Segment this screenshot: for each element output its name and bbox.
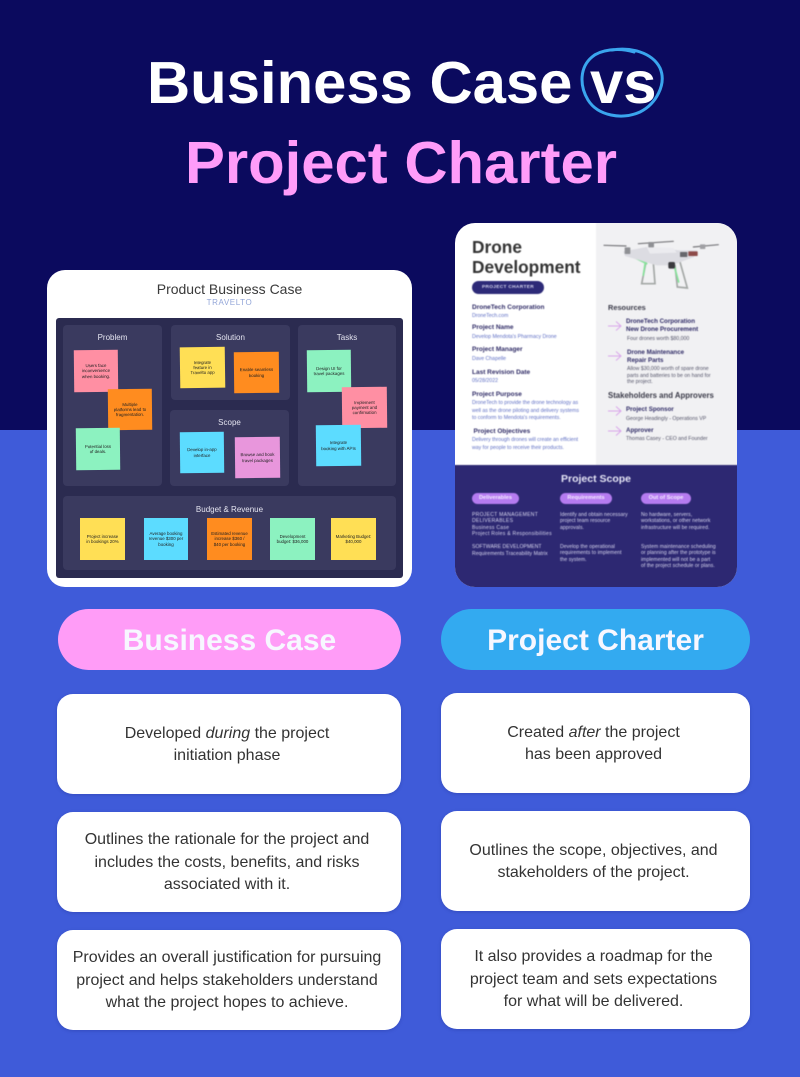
scope column: out of scope: infrastructure will be required. [641, 525, 709, 531]
charter tag: PROJECT CHARTER [482, 285, 534, 290]
scope column: deliverables: Project Roles & Responsibilities [472, 531, 552, 537]
field value: DroneTech to provide the drone technology as [472, 400, 578, 406]
sticky note: travel packages [314, 371, 344, 376]
heading pill: project charter: Project Charter [487, 624, 704, 657]
card: business case justification [57, 930, 401, 1030]
field value: way for people to receive their products. [472, 445, 564, 451]
panel: scope: Scope [218, 418, 241, 427]
title word: vs: vs [590, 49, 657, 116]
tag: requirements [560, 493, 612, 504]
sticky note: booking [249, 372, 264, 378]
panel: tasks [298, 325, 396, 486]
scope column: requirements: project team resource [560, 518, 610, 524]
sticky note [108, 389, 152, 430]
sticky note [342, 387, 387, 428]
tag: requirements: Requirements [567, 495, 605, 501]
sticky note: feature in [193, 365, 212, 370]
sticky note [76, 428, 120, 470]
tag: deliverables [472, 493, 519, 504]
sticky note: Browse and book [240, 452, 274, 457]
scope column: out of scope second block: System maintenance scheduling [641, 544, 716, 550]
approver title: Project Sponsor [626, 406, 674, 413]
scope column: requirements second block: Develop the operational [560, 544, 615, 550]
sticky note: Development [280, 534, 305, 539]
card: project charter roadmap: for what will be delivered. [504, 993, 683, 1010]
sticky note [234, 352, 279, 393]
resource title: Repair Parts [627, 357, 663, 364]
panel: problem: Problem [98, 333, 127, 342]
scope column: out of scope second block: or planning after the prototype is [641, 550, 716, 556]
charter resources [608, 303, 714, 442]
resource text: Allow $30,000 worth of spare drone [627, 366, 709, 372]
charter heading: Development [472, 257, 581, 277]
charter scope background [445, 465, 745, 595]
scope column: out of scope second block: of the project schedule or plans. [641, 563, 715, 569]
field: DroneTech Corporation [472, 304, 544, 311]
icon: arrow [608, 426, 622, 436]
scope column: deliverables: Business Case [472, 525, 509, 531]
charter heading [472, 237, 582, 278]
scope column: deliverables second block [472, 543, 548, 557]
panel: tasks: Tasks [337, 333, 357, 342]
sticky note [180, 432, 224, 473]
sticky note: of deals. [90, 449, 106, 454]
card: business case justification: Provides an overall justification for pursuing [73, 949, 381, 966]
field value [472, 436, 578, 451]
panel: solution [171, 325, 290, 400]
sticky note: fragmentation. [116, 412, 144, 417]
sticky note: Marketing Budget: [336, 534, 371, 539]
scope column: requirements: Identify and obtain necessary [560, 512, 628, 518]
scope heading: Project Scope [561, 473, 631, 485]
template subheading: TRAVELTO [207, 298, 252, 307]
sticky note: travel packages [242, 457, 273, 463]
card: project charter roadmap: It also provides a roadmap for the [474, 948, 713, 965]
resource title: DroneTech Corporation [626, 318, 695, 325]
sticky note: Integrate [330, 440, 347, 445]
resource title [626, 318, 699, 333]
card: business case rationale: includes the costs, benefits, and risks [94, 854, 360, 871]
scope column: out of scope: No hardware, servers, [641, 512, 692, 518]
card: project charter timing: has been approved [525, 746, 662, 763]
card: project charter scope [441, 811, 750, 911]
field: Project Manager [472, 346, 523, 353]
board background [56, 318, 403, 578]
panel: solution: Solution [216, 333, 245, 342]
sticky note: Average booking [150, 531, 182, 536]
section heading: Stakeholders and Approvers [608, 391, 714, 400]
approver text: George Headingly - Operations VP [626, 416, 706, 422]
approver text: Thomas Casey - CEO and Founder [626, 436, 708, 442]
sticky note: in bookings 20% [86, 539, 119, 544]
sticky note: Integrate [194, 359, 211, 365]
scope column: deliverables: DELIVERABLES [472, 518, 513, 524]
sticky note [144, 518, 188, 560]
field value: to conform to Mendota's requirements. [472, 415, 561, 421]
sticky note: Users face [85, 363, 106, 368]
icon: drone [603, 240, 720, 290]
sticky note: $40 per booking [214, 542, 245, 547]
sticky note: booking [158, 542, 174, 547]
resource title: Drone Maintenance [627, 349, 684, 356]
field: Last Revision Date [472, 369, 530, 376]
resource text: Four drones worth $80,000 [627, 336, 689, 342]
dark navy header background [0, 0, 800, 430]
scope column: out of scope [640, 512, 711, 531]
scope column: deliverables [472, 511, 552, 537]
scope column: deliverables second block: Requirements Traceability Matrix [472, 551, 548, 557]
sticky note: Estimated revenue [211, 531, 248, 536]
scope column: requirements second block: the system. [560, 557, 587, 563]
sticky note [74, 350, 118, 392]
tag: out of scope: Out of Scope [649, 495, 683, 501]
resource text: parts and batteries to be on hand for [627, 372, 711, 378]
field: Project Name [472, 324, 514, 331]
panel: budget and revenue [63, 496, 396, 570]
sticky note: booking with APIs [321, 445, 356, 451]
card: project charter roadmap: project team and sets expectations [470, 971, 717, 988]
heading pill: business case: Business Case [123, 624, 336, 657]
card: business case justification: project and helps stakeholders understand [76, 972, 378, 989]
panel: problem [63, 325, 162, 486]
field value: DroneTech.com [472, 313, 508, 319]
icon: arrow [608, 406, 622, 416]
field value: Develop Mendota's Pharmacy Drone [472, 334, 557, 340]
scope column: requirements: approvals. [560, 525, 584, 531]
sticky note: Implement [354, 399, 375, 405]
scope column: requirements second block [560, 543, 622, 563]
card: business case timing: Developed during the project [125, 724, 329, 742]
sticky note: Multiple [122, 401, 138, 407]
card: business case rationale: associated with it. [164, 876, 290, 893]
card: project charter roadmap [441, 929, 750, 1029]
sticky note: revenue $300 per [149, 536, 183, 541]
heading pill: project charter [441, 609, 750, 670]
sticky note: Develop in-app [187, 447, 217, 452]
panel: project charter template [455, 223, 737, 587]
title line: Business Case: Business Case [147, 49, 572, 116]
sticky note [80, 518, 125, 560]
card: business case justification: what the project hopes to achieve. [106, 994, 348, 1011]
hand-drawn circle around vs [580, 48, 664, 118]
sticky note [270, 518, 315, 560]
sticky note: Enable seamless [240, 367, 273, 372]
sticky note: Project increase [87, 534, 118, 539]
charter details [472, 304, 580, 451]
tag: out of scope [641, 493, 691, 504]
field value: 05/28/2022 [472, 378, 498, 384]
sticky note: platforms lead to [114, 407, 146, 412]
scope column: requirements second block: requirements to implement [560, 550, 622, 556]
field: Project Purpose [472, 391, 522, 398]
sticky note: payment and [352, 405, 377, 410]
scope column: out of scope second block: implemented will not be a part [641, 557, 710, 563]
charter right column background [596, 215, 746, 465]
card: business case rationale [57, 812, 401, 912]
card: project charter timing [441, 693, 750, 793]
icon: arrow [608, 351, 622, 361]
resource title: New Drone Procurement [626, 326, 698, 333]
field value: Delivery through drones will create an efficient [472, 437, 578, 443]
card: business case timing [57, 694, 401, 794]
scope column: deliverables: PROJECT MANAGEMENT [472, 512, 538, 518]
charter heading: Drone [472, 237, 522, 257]
sticky note: Potential loss [85, 444, 111, 449]
section heading: Resources [608, 303, 646, 312]
field value [472, 399, 580, 421]
card: project charter scope: Outlines the scope, objectives, and [469, 842, 718, 858]
resource text [626, 365, 711, 385]
sticky note: inconvenience [82, 368, 110, 373]
tag: deliverables: Deliverables [479, 495, 512, 501]
card: project charter timing: Created after the project [507, 724, 680, 740]
sticky note [331, 518, 376, 560]
sticky note: when booking. [82, 373, 110, 379]
field value: well as the drone piloting and delivery systems [472, 408, 579, 414]
resource text: the project. [627, 379, 653, 385]
card: business case rationale: Outlines the rationale for the project and [85, 831, 369, 848]
sticky note [207, 518, 252, 560]
approver title: Approver [626, 427, 654, 434]
sticky note: Travelto app [190, 370, 215, 375]
template heading: Product Business Case [157, 281, 302, 297]
panel: budget and revenue: Budget & Revenue [196, 505, 263, 514]
sticky note: budget: $36,000 [277, 539, 308, 544]
panel: business case template [47, 270, 412, 587]
scope column: requirements [560, 512, 628, 531]
card: business case timing: initiation phase [174, 747, 280, 764]
sticky note [235, 437, 280, 478]
scope column: out of scope second block [640, 543, 716, 569]
sticky note: increase $360 / [214, 536, 244, 541]
icon: arrow [608, 321, 622, 331]
sticky note: $40,000 [346, 539, 361, 544]
title [147, 48, 664, 196]
heading pill: business case [58, 609, 401, 670]
field value: Dave Chapelle [472, 356, 506, 362]
scope column: deliverables second block: SOFTWARE DEVELOPMENT [472, 544, 542, 550]
sticky note: Design UI for [316, 366, 342, 371]
resource title [626, 348, 684, 364]
title line: Project Charter: Project Charter [185, 129, 617, 196]
field: Project Objectives [474, 428, 530, 435]
card: project charter scope: stakeholders of the project. [497, 864, 690, 881]
sticky note: confirmation [353, 410, 377, 415]
scope column: out of scope: workstations, or other network [641, 518, 710, 524]
panel: scope [170, 410, 289, 486]
charter tag [472, 281, 544, 294]
sticky note [180, 347, 225, 388]
sticky note [307, 350, 351, 392]
sticky note [316, 425, 361, 466]
sticky note: interface [194, 452, 210, 458]
